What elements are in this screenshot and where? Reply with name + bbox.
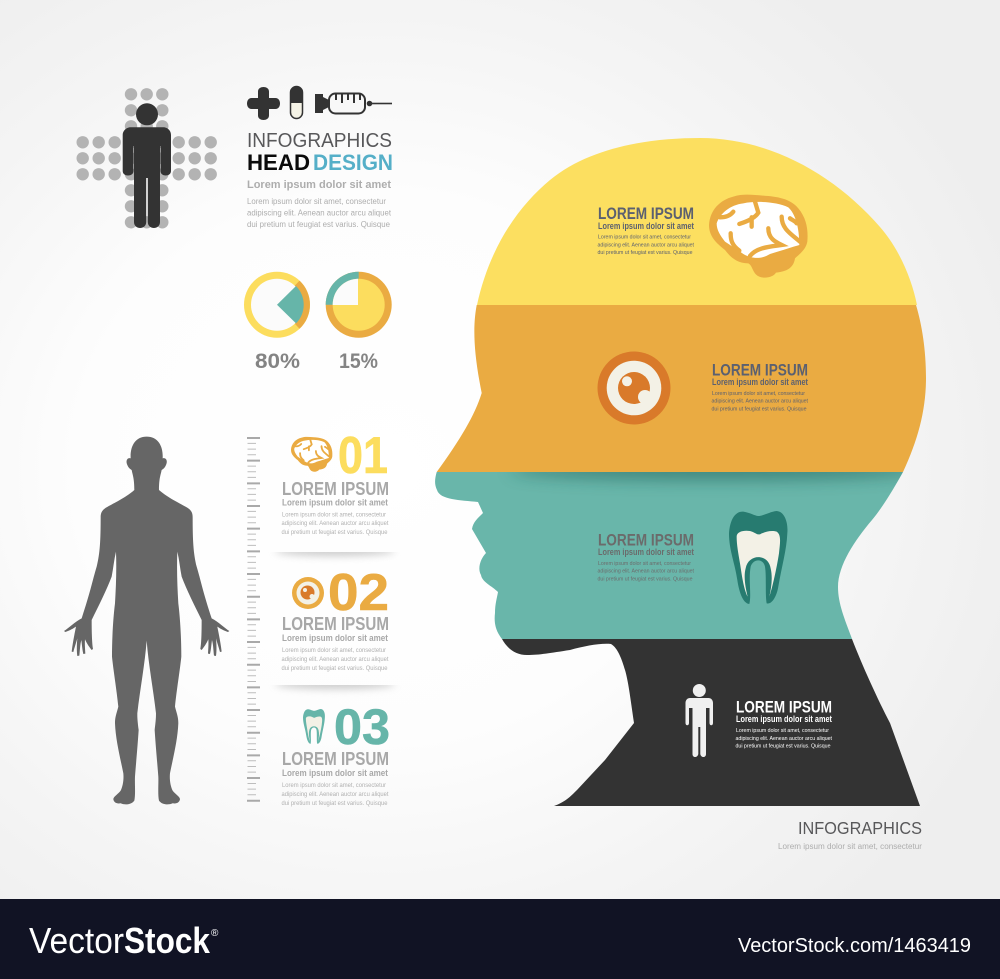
ruler scale: [252, 437, 254, 802]
text: teal band: LOREM IPSUM: [598, 532, 694, 550]
text: step 01: [282, 479, 389, 536]
text: step 02: Lorem ipsum dolor sit amet, consectetur: [282, 648, 386, 654]
text: step 03: LOREM IPSUM: [282, 749, 389, 769]
text: yellow band: dui pretium ut feugiat est varius. Quisque: [598, 250, 692, 256]
text: orange band: adipiscing elit. Aenean auctor arcu aliquet: [712, 399, 808, 405]
icon: person white: [686, 684, 713, 757]
text: dark band: dui pretium ut feugiat est varius. Quisque: [736, 744, 830, 750]
footer id: VectorStock.com/1463419: [738, 935, 971, 957]
icon: brain: [709, 195, 808, 278]
chart: 15% pie: [326, 272, 392, 338]
title: HEAD: [247, 150, 310, 175]
panel: step 02: [275, 564, 395, 689]
panel: head orange band: [437, 305, 926, 472]
text: dark band: [736, 699, 832, 750]
icon: syringe: [315, 94, 392, 114]
label: 15%: 15%: [339, 350, 378, 373]
text: step 03: Lorem ipsum dolor sit amet: [282, 768, 389, 779]
text: yellow band: adipiscing elit. Aenean auctor arcu aliquet: [598, 242, 694, 248]
footer logo: [29, 920, 219, 961]
text: orange band: Lorem ipsum dolor sit amet: [712, 377, 808, 387]
text: step 02: Lorem ipsum dolor sit amet: [282, 633, 389, 644]
text: step 02: LOREM IPSUM: [282, 614, 389, 634]
number 03: 03: [334, 699, 390, 755]
icon: pill: [290, 86, 303, 118]
icon: person on dotted cross: [76, 88, 217, 228]
text: yellow band: [598, 205, 694, 256]
text: step 01: dui pretium ut feugiat est varius. Quisque: [282, 530, 388, 536]
panel: head dark neck band: [502, 639, 920, 806]
footer bar: [0, 899, 1000, 979]
footer logo: Stock: [124, 920, 211, 961]
caption: Lorem ipsum dolor sit amet, consectetur: [778, 842, 922, 851]
chart: 80% pie: [244, 272, 310, 338]
icon: brain small: [291, 437, 332, 472]
number 01: 01: [338, 427, 388, 485]
text: step 03: [282, 749, 389, 807]
text: step 01: Lorem ipsum dolor sit amet, consectetur: [282, 512, 386, 518]
text: teal band: [598, 532, 694, 582]
intro text block: [247, 179, 392, 229]
title: DESIGN: [313, 150, 393, 175]
text: yellow band: LOREM IPSUM: [598, 205, 694, 223]
intro text block: Lorem ipsum dolor sit amet, consectetur: [247, 197, 386, 206]
icon: medical cross: [247, 87, 280, 120]
text: yellow band: Lorem ipsum dolor sit amet, consectetur: [598, 235, 691, 241]
icon: eye small: [292, 577, 324, 609]
text: orange band: LOREM IPSUM: [712, 362, 808, 380]
text: dark band: LOREM IPSUM: [736, 699, 832, 717]
text: step 01: Lorem ipsum dolor sit amet: [282, 498, 389, 508]
text: dark band: Lorem ipsum dolor sit amet, consectetur: [736, 728, 829, 734]
text: orange band: dui pretium ut feugiat est varius. Quisque: [712, 406, 806, 412]
title: [247, 129, 393, 175]
text: orange band: [712, 362, 808, 412]
text: step 03: dui pretium ut feugiat est varius. Quisque: [282, 801, 388, 807]
panel: step 03: [282, 699, 390, 807]
icon: tooth small: [303, 709, 325, 744]
text: step 01: adipiscing elit. Aenean auctor arcu aliquet: [282, 521, 389, 527]
text: yellow band: Lorem ipsum dolor sit amet: [598, 221, 694, 231]
footer logo: Vector: [29, 920, 124, 961]
footer logo: ®: [211, 928, 219, 939]
text: teal band: Lorem ipsum dolor sit amet: [598, 547, 694, 557]
text: step 02: dui pretium ut feugiat est varius. Quisque: [282, 666, 388, 672]
panel: head yellow band: [477, 138, 917, 305]
intro text block: dui pretium ut feugiat est varius. Quisque: [247, 220, 391, 229]
label: 80%: 80%: [255, 350, 300, 373]
text: teal band: dui pretium ut feugiat est varius. Quisque: [598, 576, 692, 582]
text: dark band: Lorem ipsum dolor sit amet: [736, 714, 832, 724]
text: dark band: adipiscing elit. Aenean auctor arcu aliquet: [736, 736, 832, 742]
text: step 03: Lorem ipsum dolor sit amet, consectetur: [282, 783, 386, 789]
text: step 02: adipiscing elit. Aenean auctor arcu aliquet: [282, 657, 389, 663]
panel: step 01: [275, 427, 395, 556]
title: INFOGRAPHICS: [247, 129, 392, 152]
caption: INFOGRAPHICS: [798, 818, 922, 838]
human body silhouette: [64, 437, 229, 804]
text: teal band: Lorem ipsum dolor sit amet, consectetur: [598, 561, 691, 567]
caption: [778, 818, 922, 851]
intro text block: Lorem ipsum dolor sit amet: [247, 179, 391, 191]
text: orange band: Lorem ipsum dolor sit amet, consectetur: [712, 391, 805, 397]
icon: tooth: [729, 511, 787, 604]
text: teal band: adipiscing elit. Aenean auctor arcu aliquet: [598, 569, 694, 575]
text: step 03: adipiscing elit. Aenean auctor arcu aliquet: [282, 792, 389, 798]
text: step 01: LOREM IPSUM: [282, 479, 389, 499]
panel: head teal band: [435, 460, 920, 639]
text: step 02: [282, 614, 389, 672]
intro text block: adipiscing elit. Aenean auctor arcu aliquet: [247, 208, 392, 218]
number 02: 02: [328, 564, 389, 622]
icon: eye: [598, 352, 670, 424]
